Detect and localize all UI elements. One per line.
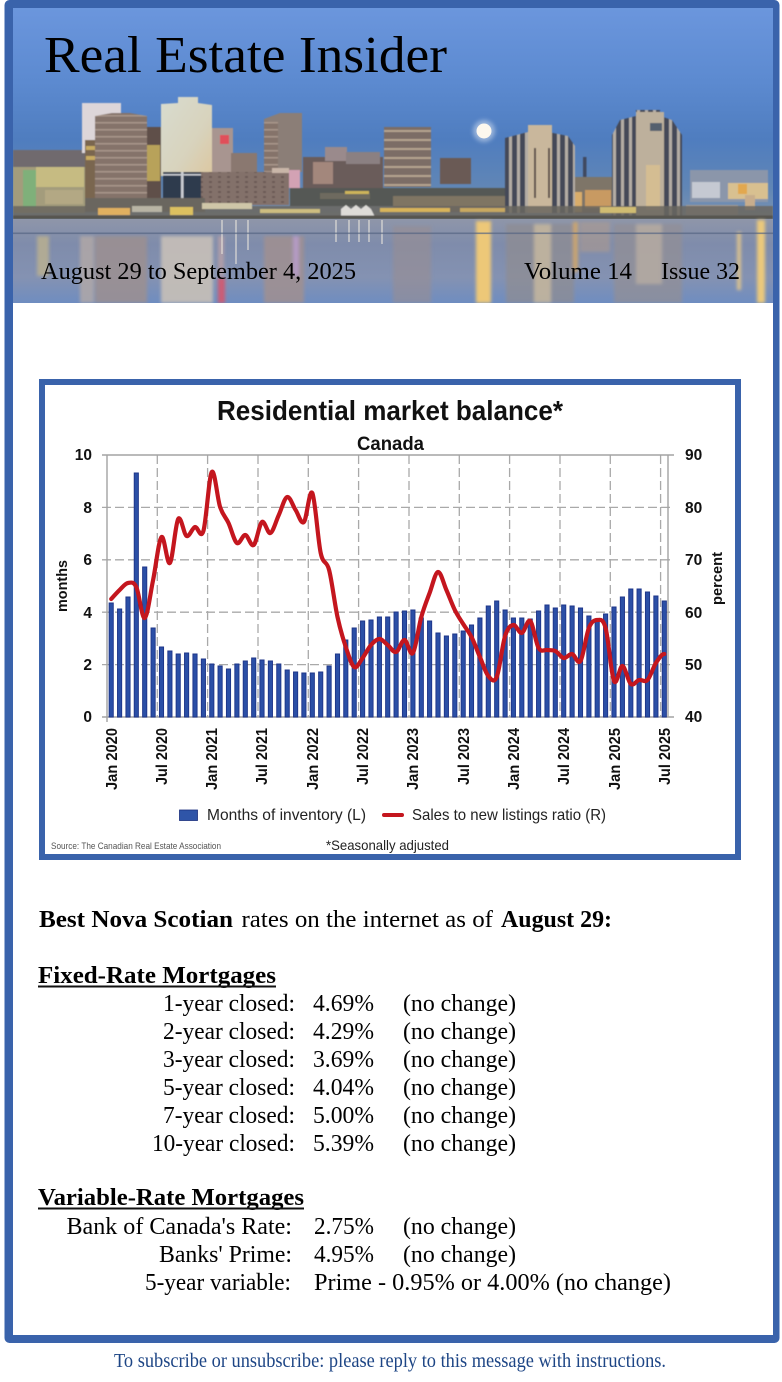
seasonal adjustment note: *Seasonally adjusted xyxy=(326,837,449,853)
1-year row: 1-year closed: xyxy=(163,991,295,1017)
7-year row: 7-year closed: xyxy=(163,1103,295,1129)
photo: city skyline at dusk with harbour reflection xyxy=(13,8,773,303)
10-year row: (no change) xyxy=(403,1131,516,1157)
source note: Source: The Canadian Real Estate Association xyxy=(51,841,221,852)
x axis date labels: Jul 2023 xyxy=(456,728,473,785)
legend: Months of inventory (L) xyxy=(207,807,366,824)
2-year row xyxy=(163,1019,516,1045)
intro sentence xyxy=(39,907,612,933)
line: sales to new listings ratio xyxy=(111,472,664,685)
left axis labels: 6 xyxy=(83,552,92,569)
10-year row: 5.39% xyxy=(313,1131,374,1157)
x axis date labels: Jul 2020 xyxy=(154,728,171,785)
left axis labels: 0 xyxy=(83,709,92,726)
x axis date labels: Jan 2022 xyxy=(305,728,322,790)
x axis date labels: Jul 2025 xyxy=(657,728,674,785)
3-year row: (no change) xyxy=(403,1047,516,1073)
intro sentence: Best Nova Scotian xyxy=(39,907,233,933)
right axis title: percent xyxy=(709,552,726,605)
5-year variable row xyxy=(145,1270,671,1296)
1-year row xyxy=(163,991,516,1017)
right axis labels: 90 xyxy=(685,447,702,464)
variable-rate mortgages table xyxy=(38,1185,671,1296)
bars: months of inventory xyxy=(109,473,666,717)
2-year row: 4.29% xyxy=(313,1019,374,1045)
heading: Variable-Rate Mortgages xyxy=(38,1185,304,1211)
Banks' Prime row: 4.95% xyxy=(314,1242,374,1268)
3-year row xyxy=(163,1047,516,1073)
x axis date labels: Jan 2021 xyxy=(204,728,221,790)
5-year row: 4.04% xyxy=(313,1075,374,1101)
Banks' Prime row: (no change) xyxy=(403,1242,516,1268)
1-year row: 4.69% xyxy=(313,991,374,1017)
icon: moon xyxy=(473,120,495,142)
left axis labels xyxy=(75,447,92,726)
heading: Fixed-Rate Mortgages xyxy=(38,963,276,989)
chart subtitle: Canada xyxy=(357,434,424,455)
Bank of Canada row: 2.75% xyxy=(314,1214,374,1240)
x axis date labels: Jan 2024 xyxy=(506,728,523,790)
fixed-rate mortgages table xyxy=(38,963,516,1157)
2-year row: 2-year closed: xyxy=(163,1019,295,1045)
intro sentence: August 29: xyxy=(501,907,612,933)
5-year variable row: 5-year variable: xyxy=(145,1270,291,1296)
left axis labels: 2 xyxy=(83,657,92,674)
legend xyxy=(180,807,606,824)
x axis date labels: Jan 2023 xyxy=(405,728,422,790)
x axis date labels: Jan 2025 xyxy=(607,728,624,790)
right axis labels: 70 xyxy=(685,552,702,569)
chart title: Residential market balance* xyxy=(217,395,563,426)
volume number: Volume 14 xyxy=(524,259,632,285)
7-year row: 5.00% xyxy=(313,1103,374,1129)
Bank of Canada row: (no change) xyxy=(403,1214,516,1240)
right axis labels: 60 xyxy=(685,605,702,622)
intro sentence: rates on the internet as of xyxy=(242,907,493,933)
10-year row: 10-year closed: xyxy=(152,1131,295,1157)
1-year row: (no change) xyxy=(403,991,516,1017)
panel: residential market balance chart xyxy=(42,382,738,857)
5-year row xyxy=(163,1075,516,1101)
Bank of Canada row: Bank of Canada's Rate: xyxy=(66,1214,292,1240)
x axis date labels: Jul 2021 xyxy=(254,728,271,785)
5-year variable row: Prime - 0.95% or 4.00% (no change) xyxy=(314,1270,671,1296)
7-year row xyxy=(163,1103,516,1129)
left axis labels: 4 xyxy=(83,605,92,622)
x axis date labels: Jul 2022 xyxy=(355,728,372,785)
7-year row: (no change) xyxy=(403,1103,516,1129)
right axis labels: 80 xyxy=(685,500,702,517)
2-year row: (no change) xyxy=(403,1019,516,1045)
header banner xyxy=(13,8,773,303)
5-year row: 5-year closed: xyxy=(163,1075,295,1101)
3-year row: 3.69% xyxy=(313,1047,374,1073)
5-year row: (no change) xyxy=(403,1075,516,1101)
right axis labels: 50 xyxy=(685,657,702,674)
title: Real Estate Insider xyxy=(44,27,447,84)
issue date: August 29 to September 4, 2025 xyxy=(41,259,356,285)
right axis labels: 40 xyxy=(685,709,702,726)
3-year row: 3-year closed: xyxy=(163,1047,295,1073)
x axis date labels xyxy=(104,728,674,790)
Banks' Prime row: Banks' Prime: xyxy=(159,1242,292,1268)
10-year row xyxy=(152,1131,516,1157)
left axis labels: 8 xyxy=(83,500,92,517)
issue number: Issue 32 xyxy=(661,259,740,285)
x axis date labels: Jul 2024 xyxy=(556,728,573,785)
legend: Sales to new listings ratio (R) xyxy=(412,807,606,824)
footer note: To subscribe or unsubscribe: please reply to this message with instructions. xyxy=(114,1351,666,1372)
x axis date labels: Jan 2020 xyxy=(104,728,121,790)
left axis labels: 10 xyxy=(75,447,92,464)
left axis title: months xyxy=(54,560,71,612)
Banks' Prime row xyxy=(159,1242,516,1268)
Bank of Canada row xyxy=(66,1214,516,1240)
right axis labels xyxy=(685,447,702,726)
